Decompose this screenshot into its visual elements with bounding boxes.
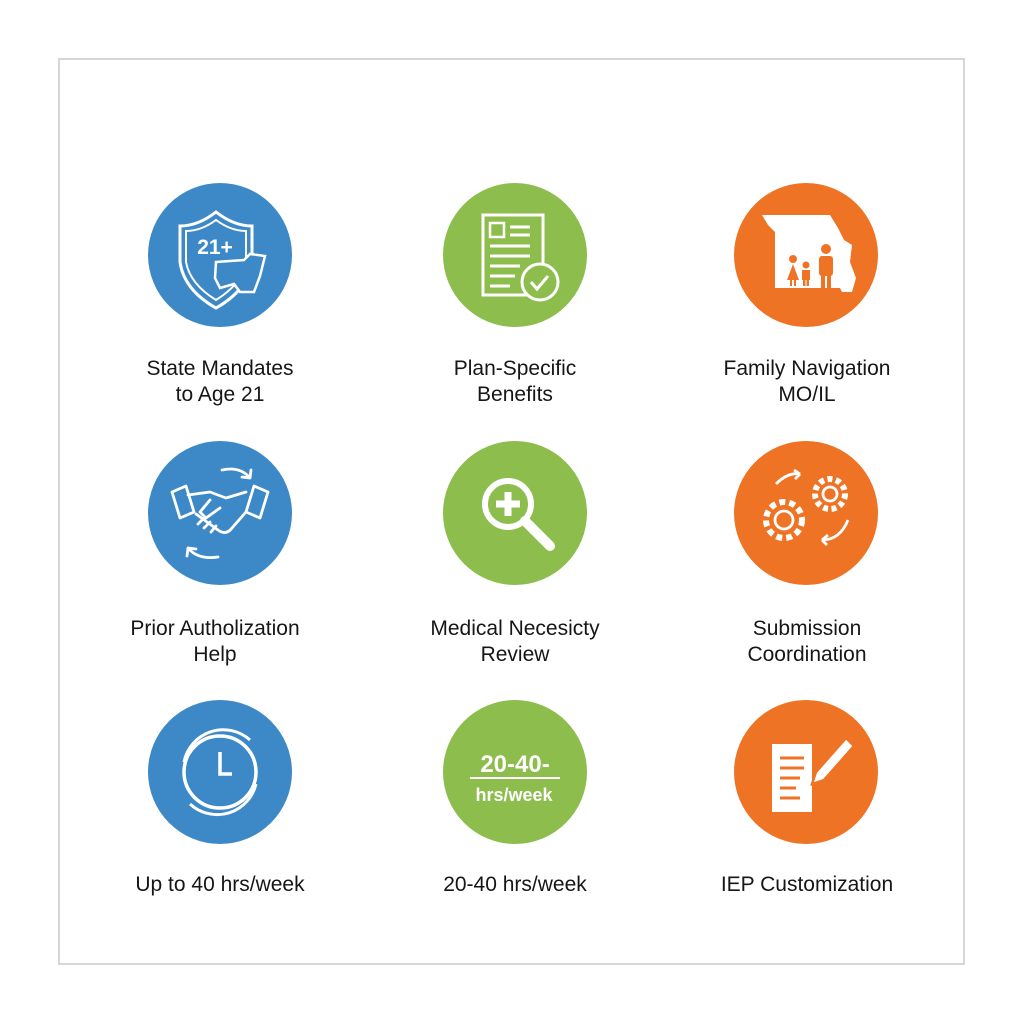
label: state mandates: to Age 21 bbox=[176, 383, 264, 406]
icon: handshake bbox=[148, 441, 292, 585]
label: family navigation bbox=[724, 357, 890, 406]
icon: document pencil bbox=[734, 700, 878, 844]
label: family navigation: Family Navigation bbox=[724, 357, 890, 380]
label: up to 40: Up to 40 hrs/week bbox=[135, 873, 305, 896]
frame bbox=[58, 58, 965, 965]
icon: gears bbox=[734, 441, 878, 585]
icon: clock bbox=[148, 700, 292, 844]
icon: 20-40 hrs bbox=[443, 700, 587, 844]
icon: document check bbox=[443, 183, 587, 327]
label: submission: Coordination bbox=[747, 643, 867, 666]
label: prior auth: Prior Autholization bbox=[130, 617, 300, 640]
label: plan-specific: Benefits bbox=[477, 383, 553, 406]
label: submission: Submission bbox=[753, 617, 861, 640]
label: submission bbox=[747, 617, 867, 666]
label: medical necessity: Medical Necesicty bbox=[430, 617, 600, 640]
label: plan-specific: Plan-Specific bbox=[454, 357, 576, 380]
label: prior auth bbox=[130, 617, 300, 666]
label: plan-specific bbox=[454, 357, 576, 406]
label: medical necessity: Review bbox=[481, 643, 549, 666]
label: state mandates: State Mandates bbox=[146, 357, 294, 380]
label: prior auth: Help bbox=[193, 643, 237, 666]
icon: shield 21+ bbox=[148, 183, 292, 327]
icon: 20-40 hrs: 20-40- bbox=[480, 751, 550, 778]
label: medical necessity bbox=[430, 617, 600, 666]
label: state mandates bbox=[146, 357, 294, 406]
icon: 20-40 hrs: hrs/week bbox=[475, 785, 554, 805]
icon: missouri family bbox=[734, 183, 878, 327]
label: 20-40: 20-40 hrs/week bbox=[443, 873, 587, 896]
label: IEP: IEP Customization bbox=[721, 873, 893, 896]
icon: magnifier plus bbox=[443, 441, 587, 585]
icon: shield 21+: 21+ bbox=[197, 236, 233, 259]
label: family navigation: MO/IL bbox=[778, 383, 836, 406]
